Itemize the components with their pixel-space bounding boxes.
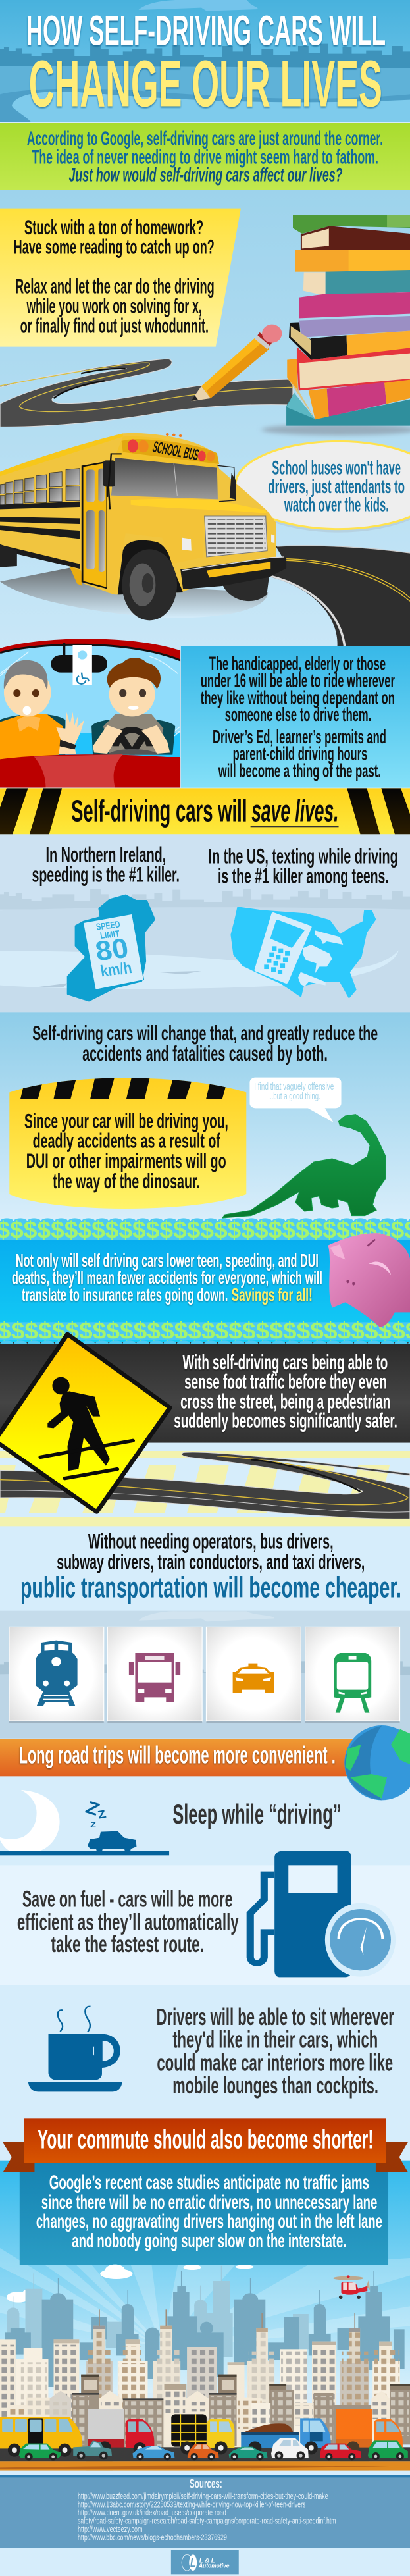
black cage truck	[171, 2414, 234, 2454]
dinosaur speech bubble	[249, 1078, 342, 1122]
heading band: save lives	[0, 788, 410, 834]
commute text box	[20, 2163, 388, 2265]
elderly passenger	[0, 660, 84, 759]
transit text	[57, 1530, 365, 1574]
school bus sign	[122, 433, 219, 464]
panel: school bus	[0, 433, 410, 646]
dinosaur text: the way of the dinosaur.	[53, 1170, 200, 1193]
panel: leading killers	[0, 834, 410, 1012]
panel: mobile lounge	[0, 1985, 410, 2163]
yellow callout	[0, 209, 241, 347]
homework text: Stuck with a ton of homework?	[24, 217, 203, 239]
icon: Ireland map with speed limit sign	[68, 895, 154, 1001]
blue dump truck	[241, 2418, 331, 2454]
windshield	[111, 458, 218, 499]
source links: http://www.doeni.gov.uk/index/road_users/corporate-road-	[78, 2508, 228, 2518]
illustration: city with traffic	[0, 2265, 410, 2472]
icon: pencil	[191, 325, 282, 401]
fuel text	[17, 1887, 239, 1957]
icon: fuel pump with gauge	[250, 1851, 396, 1977]
icon card: bus	[107, 1627, 202, 1723]
speed limit text: km/h	[99, 959, 133, 980]
logo	[171, 2550, 239, 2574]
red truck	[88, 2409, 154, 2456]
mirror and handicap tag	[51, 643, 107, 685]
icon card: train	[9, 1627, 104, 1723]
light sky background	[0, 190, 410, 787]
source links	[78, 2492, 336, 2542]
reduction text	[32, 1022, 378, 1065]
panel: homework	[0, 209, 410, 435]
faded city background	[0, 1611, 410, 1739]
commute text	[36, 2171, 382, 2251]
source links: http://www.vecteezy.com	[78, 2525, 143, 2535]
panel: pedestrian safety	[0, 1338, 410, 1443]
homework text	[14, 217, 215, 338]
orange truck	[336, 2409, 403, 2454]
mirrors	[103, 454, 236, 509]
panel: long road trips	[0, 1725, 410, 1985]
homework text: or finally find out just whodunnit.	[20, 315, 209, 338]
source links: http://www.bbc.com/news/blogs-echochambers-28376929	[78, 2533, 227, 2542]
panel: insurance savings	[0, 1217, 410, 1344]
traffic scene	[0, 2390, 410, 2471]
panel: sources: Sources:	[190, 2475, 222, 2491]
dinosaur text	[24, 1109, 228, 1193]
dashboard	[0, 754, 181, 788]
logo: L & L	[199, 2558, 215, 2564]
Northern Ireland text: speeding is the #1 killer.	[32, 862, 180, 887]
icon: moon, road and sleeping car: Z	[90, 1820, 96, 1829]
yellow bus	[0, 2417, 82, 2457]
crosswalk with road	[0, 1443, 410, 1534]
commute ribbon	[3, 2118, 408, 2172]
icon: piggy bank	[328, 1233, 410, 1327]
header: city skyline and title	[0, 0, 410, 122]
wheels and bumper	[222, 575, 269, 601]
intro band	[0, 123, 410, 190]
icon: dinosaur	[222, 1115, 386, 1218]
icon card: taxi	[206, 1627, 301, 1723]
speed limit text	[93, 920, 133, 980]
near buildings	[8, 2390, 410, 2449]
teen driver	[91, 658, 175, 755]
dinosaur speech bubble: ...but a good thing.	[268, 1091, 320, 1102]
background towers, mid	[5, 2271, 405, 2387]
icon: helicopter	[333, 2275, 370, 2299]
bus door	[82, 462, 107, 588]
panel: accident reduction	[0, 1012, 410, 1221]
background towers, light	[7, 2266, 309, 2357]
small cars	[19, 2438, 408, 2461]
icon: moon, road and sleeping car	[0, 1790, 169, 1855]
bus windows	[0, 469, 80, 505]
panel: public transportation	[0, 1526, 410, 1739]
icon: US map with phone	[232, 907, 375, 997]
intro text	[27, 128, 383, 186]
logo: LL	[184, 2555, 196, 2570]
savings text	[12, 1250, 322, 1305]
clouds	[7, 2265, 253, 2303]
winding road	[0, 359, 293, 427]
speed limit text: LIMIT	[99, 929, 121, 941]
dinosaur speech bubble: I find that vaguely offensive	[254, 1081, 334, 1092]
icon: pedestrian crossing sign	[0, 1334, 170, 1512]
school bus sign: SCHOOL BUS	[151, 438, 201, 464]
panel: sources	[0, 2471, 410, 2576]
icon: moon, road and sleeping car: Z	[96, 1807, 107, 1821]
accessibility text	[201, 652, 395, 781]
icon: globe	[344, 1725, 410, 1800]
bubble text	[268, 456, 405, 515]
curved road	[270, 546, 410, 646]
Northern Ireland text	[32, 843, 180, 887]
caution sign callout	[9, 1075, 246, 1209]
icon: coffee cup	[28, 2007, 122, 2091]
dinosaur text: DUI or other impairments will go	[26, 1149, 226, 1172]
foreground buildings	[0, 2309, 410, 2472]
panel: passengers in car	[0, 632, 410, 834]
speed limit text: SPEED	[95, 920, 121, 932]
icon: school bus	[0, 433, 286, 620]
dinosaur text: deadly accidents as a result of	[33, 1129, 220, 1153]
icon: stack of books	[261, 215, 410, 435]
grille	[205, 516, 267, 557]
callout bubble	[236, 441, 410, 533]
homework text: while you work on solving for x,	[26, 295, 202, 318]
logo: Automotive	[198, 2563, 230, 2569]
accessibility panel	[181, 646, 410, 788]
icon card: tram	[305, 1627, 400, 1723]
icon: moon, road and sleeping car: Z	[82, 1797, 103, 1820]
pedestrian text	[174, 1351, 397, 1433]
Northern Ireland text: In Northern Ireland,	[46, 843, 166, 866]
road and ground	[0, 2447, 410, 2471]
savings text: Savings for all!	[232, 1284, 313, 1305]
fuel panel	[0, 1851, 410, 1985]
lounge text	[157, 2004, 394, 2099]
US text	[209, 845, 398, 888]
panel: commute sky	[0, 2118, 410, 2393]
speed limit text: 80	[93, 933, 130, 966]
fuel text: take the fastest route.	[51, 1932, 204, 1957]
